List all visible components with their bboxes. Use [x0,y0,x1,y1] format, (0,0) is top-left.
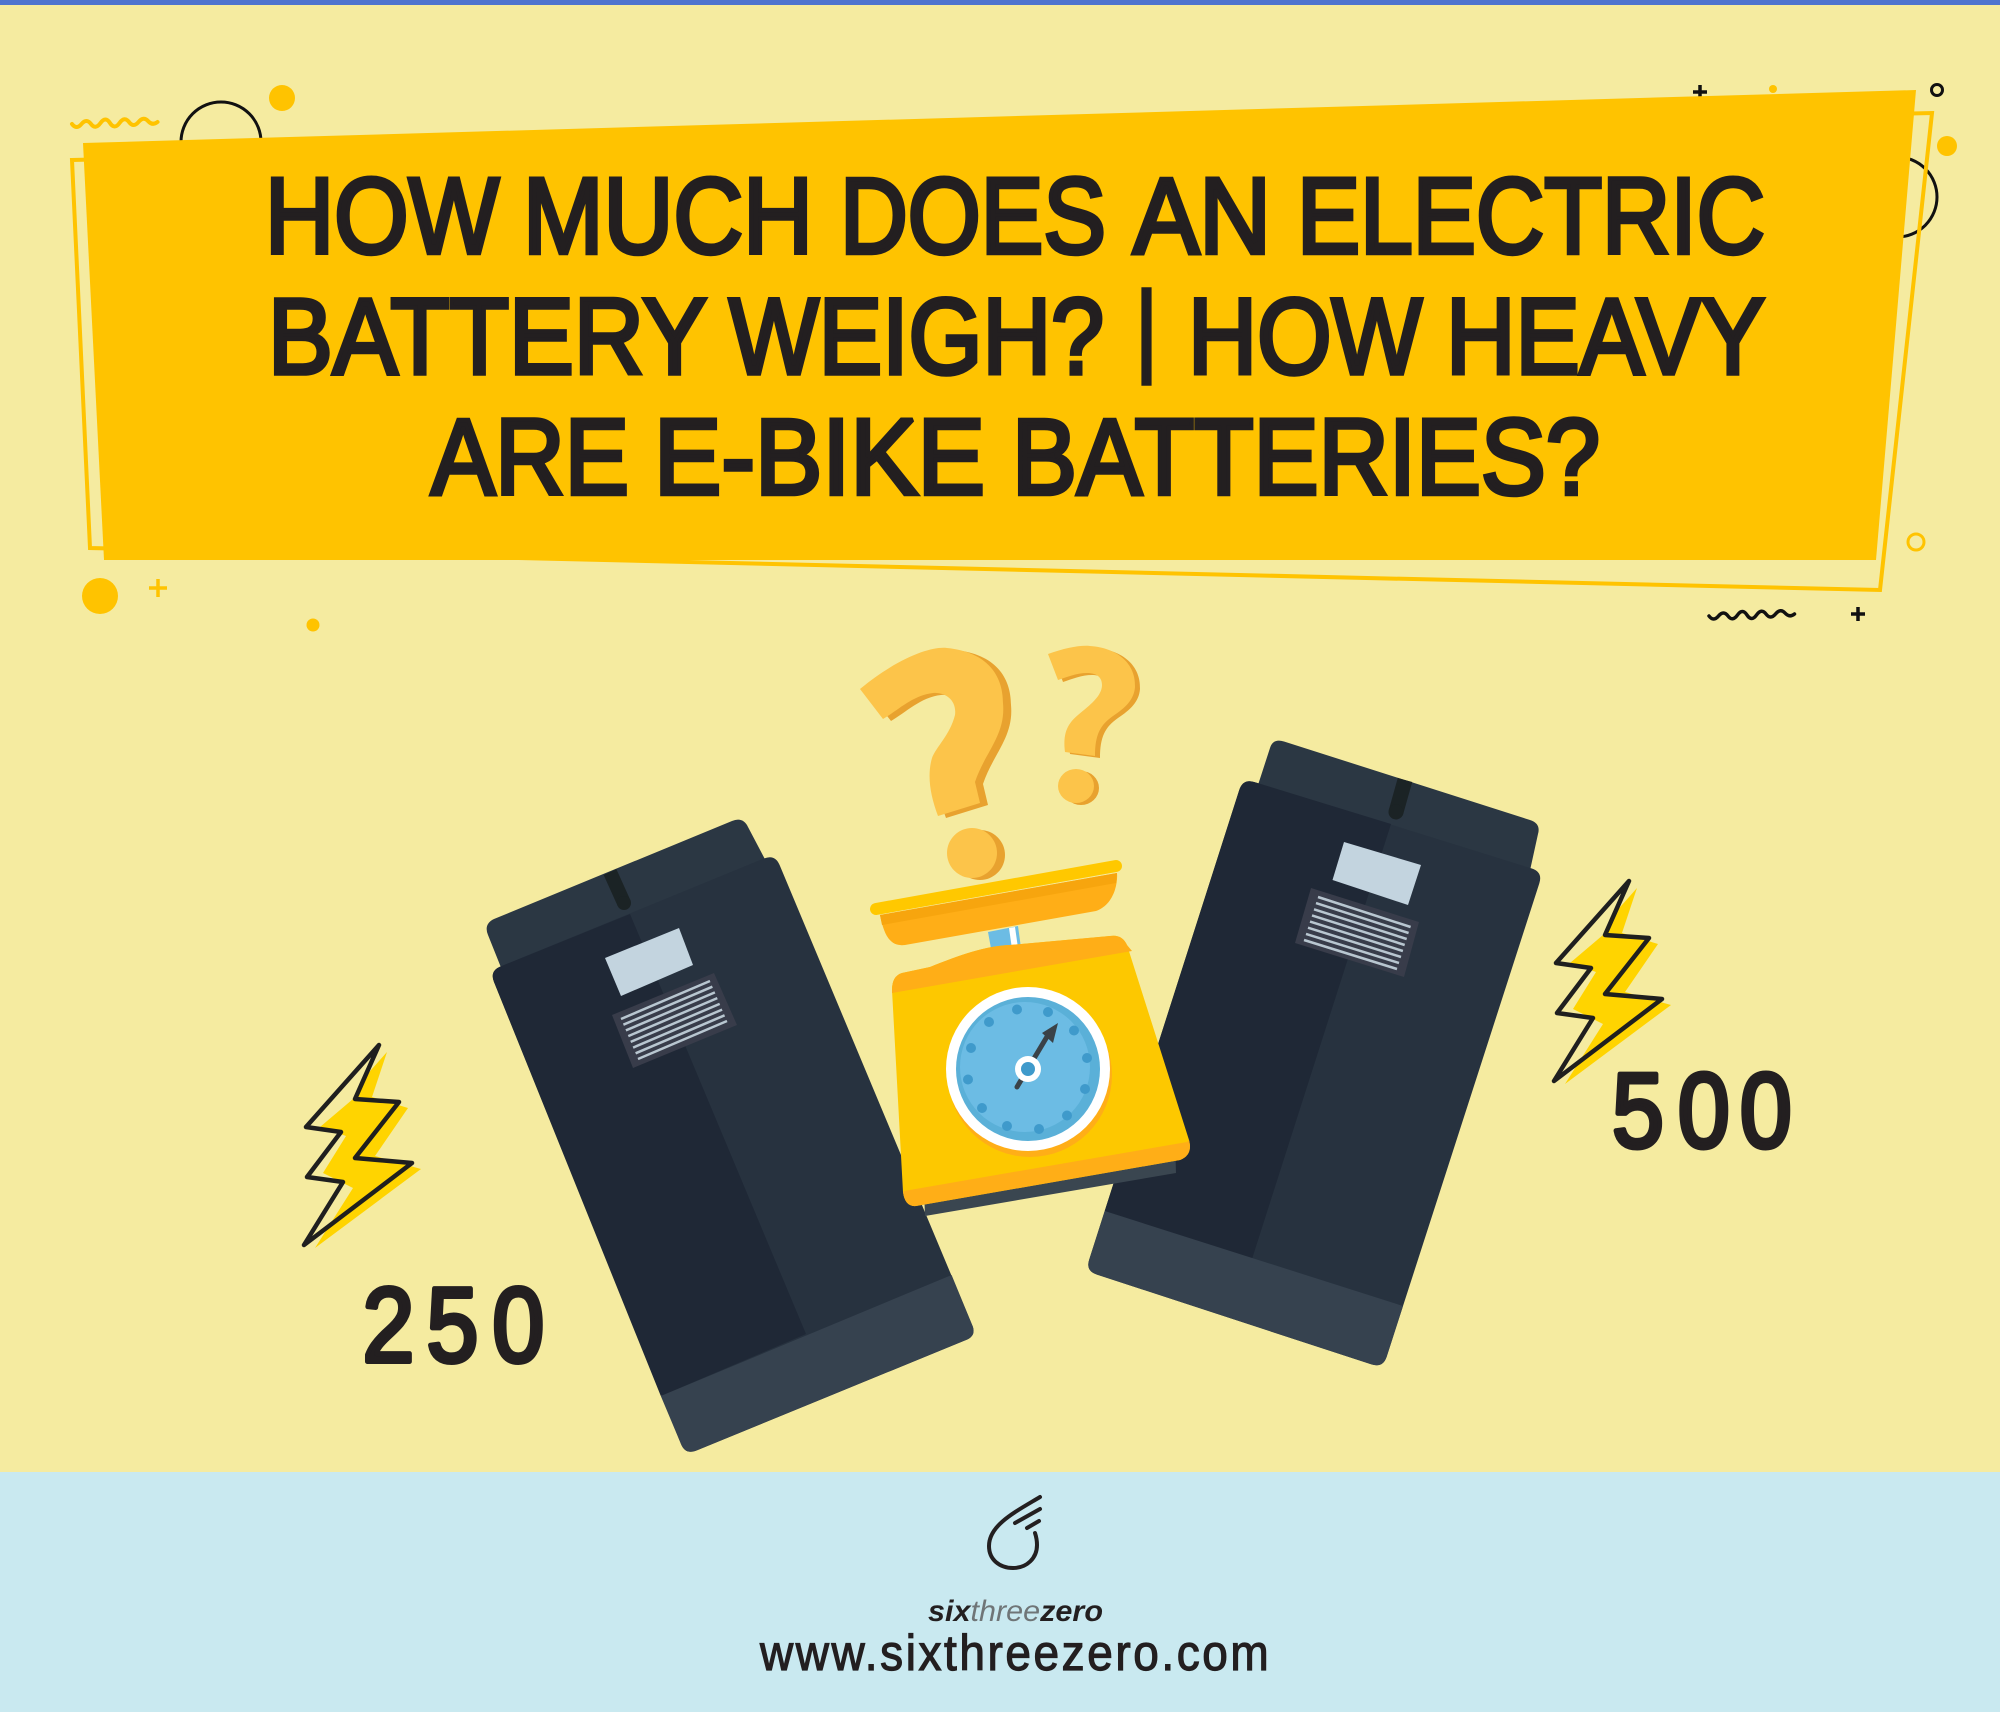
title: DOES [840,155,1106,276]
scale dial [946,987,1112,1157]
title: MUCH [523,155,813,276]
scale base shadow [924,1140,1176,1216]
scale pan [876,866,1117,945]
title: ARE [431,396,629,517]
battery: 250 [487,820,974,1452]
lightning bolt: 250 [304,1045,421,1248]
title: WEIGH? [729,276,1104,396]
battery: 500 [1088,741,1540,1365]
lightning bolt: 500 [1554,881,1671,1084]
website url: www.sixthreezero.com [759,1626,1269,1681]
weighing scale [876,866,1190,1216]
question mark: large [860,648,1011,880]
title: HEAVY [1446,276,1765,396]
title [265,155,1765,517]
icon: sixthreezero logo [989,1497,1040,1568]
title: E-BIKE [654,396,985,517]
banner panel [83,90,1916,560]
title: BATTERIES? [1012,396,1600,517]
title: BATTERY [268,276,707,396]
title: AN [1133,155,1271,276]
title: HOW [265,155,499,276]
scale stem [988,926,1021,954]
question mark: small [1048,646,1140,805]
title: HOW [1188,276,1422,396]
title: | [1136,272,1157,384]
top accent bar [0,0,2000,5]
banner outline frame [72,113,1932,590]
brand name: sixthreezero [928,1595,1103,1628]
footer band [0,1472,2000,1712]
scale body [892,936,1190,1206]
title: ELECTRIC [1297,155,1765,276]
label: 250: 250 [362,1267,544,1385]
label: 500: 500 [1612,1053,1792,1170]
decorative shapes behind banner [72,84,1957,632]
